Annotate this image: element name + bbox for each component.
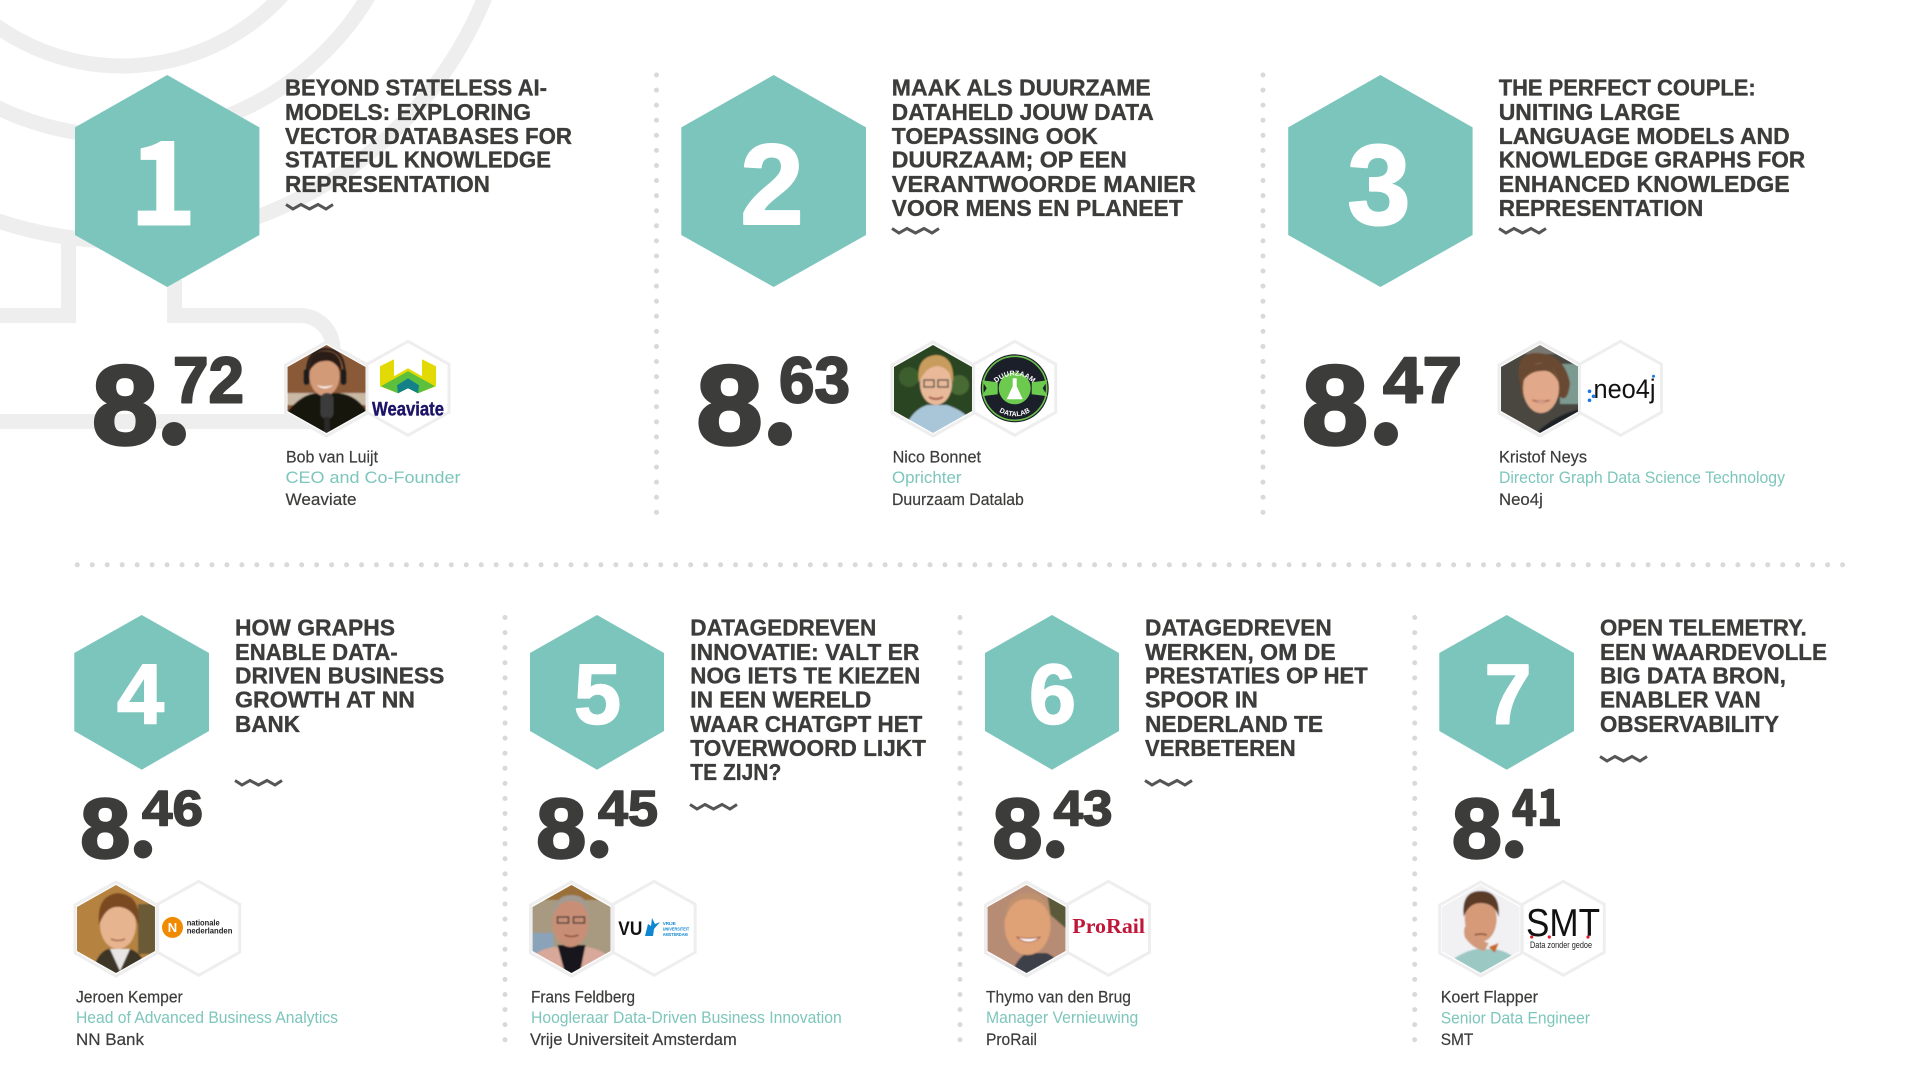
panel: talk 5 [530,615,926,1049]
speaker details: NN Bank [76,1030,144,1049]
panel: talk 1 [75,75,572,509]
title 6 [1145,615,1368,761]
title 3: ENHANCED KNOWLEDGE [1499,171,1790,197]
squiggle [892,228,939,233]
speaker details: Duurzaam Datalab [892,490,1024,509]
title 6: PRESTATIES OP HET [1145,663,1368,689]
logo: Duurzaam Datalab [972,340,1057,437]
speaker details [986,988,1138,1049]
logo: Nationale Nederlanden: nationale [187,918,220,928]
logo: Vrije Universiteit Amsterdam [613,881,695,975]
score 8.72: 8 [92,343,158,468]
title 6: VERBETEREN [1145,735,1296,761]
score 8.45: 8 [536,782,586,876]
title 4: BANK [235,711,300,737]
title 3: UNITING LARGE [1499,99,1680,125]
rank hexagon 5: 5 [574,648,621,742]
speaker details: Manager Vernieuwing [986,1008,1138,1027]
title 4: DRIVEN BUSINESS [235,663,444,689]
title 5: INNOVATIE: VALT ER [690,639,920,665]
title 5: WAAR CHATGPT HET [690,711,922,737]
portrait: Frans Feldberg [530,882,612,976]
speaker details: Koert Flapper [1441,988,1538,1006]
title 1: VECTOR DATABASES FOR [285,123,572,149]
logo: Vrije Universiteit Amsterdam: VRIJE [663,921,676,926]
logo: Nationale Nederlanden [158,881,240,975]
logo: SMT: Data zonder gedoe [1530,940,1592,951]
score 8.45: 45 [598,780,658,836]
title 3: THE PERFECT COUPLE: [1499,75,1756,101]
rank hexagon 2: 2 [740,122,804,249]
title 1: MODELS: EXPLORING [285,99,531,125]
title 4: ENABLE DATA- [235,639,398,665]
speaker details: Vrije Universiteit Amsterdam [530,1030,737,1049]
logo: Weaviate [367,341,449,435]
speaker details: Jeroen Kemper [76,988,183,1006]
portrait: Kristof Neys [1499,342,1581,436]
squiggle [690,804,737,809]
title 2: VOOR MENS EN PLANEET [892,195,1183,221]
speaker details: Weaviate [286,490,356,509]
title 7 [1600,615,1827,737]
logo: Nationale Nederlanden: nederlanden [187,926,232,936]
score 8.43: 8 [992,782,1042,876]
speaker details: Thymo van den Brug [986,988,1131,1006]
speaker details: Neo4j [1499,490,1543,509]
title 7: ENABLER VAN [1600,687,1761,713]
logo: Vrije Universiteit Amsterdam: VU [618,919,642,940]
rank hexagon 1 [75,75,259,287]
rank hexagon 4 [74,615,209,770]
title 1: BEYOND STATELESS AI- [285,75,547,101]
logo: Nationale Nederlanden: N [168,920,177,935]
squiggle [1600,756,1647,761]
score 8.43 [992,780,1112,876]
score 8.46: 8 [80,782,130,876]
rank hexagon 5 [530,615,664,770]
rank hexagon 2 [681,75,866,287]
logo: Vrije Universiteit Amsterdam: AMSTERDAM [663,932,688,937]
score 8.46: 46 [142,780,203,836]
speaker details: SMT [1441,1030,1473,1049]
title 7: EEN WAARDEVOLLE [1600,639,1827,665]
speaker details: Frans Feldberg [531,988,635,1006]
speaker details: Oprichter [892,468,962,487]
score 8.63 [696,343,850,468]
rank hexagon 1: 1 [129,91,197,259]
speaker details: Hoogleraar Data-Driven Business Innovation [531,1008,842,1027]
speaker details: ProRail [986,1030,1037,1049]
panel: talk 2 [681,75,1196,509]
panel: talk 6 [985,615,1368,1049]
speaker details [530,988,842,1049]
title 7: OBSERVABILITY [1600,711,1779,737]
rank hexagon 7 [1439,615,1574,770]
title 3: LANGUAGE MODELS AND [1499,123,1790,149]
panel: talk 3 [1288,75,1806,509]
score 8.63: 63 [779,344,850,416]
title 6: DATAGEDREVEN [1145,615,1332,641]
speaker details [286,448,461,509]
rank hexagon 3: 3 [1347,122,1411,249]
speaker details: Head of Advanced Business Analytics [76,1008,338,1027]
score 8.47: 8 [1302,343,1368,468]
score 8.47 [1302,343,1462,468]
title 5: NOG IETS TE KIEZEN [690,663,920,689]
portrait: Koert Flapper [1440,882,1522,976]
logo: SMT [1522,881,1604,975]
panel: talk 4 [74,615,444,1049]
title 1: REPRESENTATION [285,171,490,197]
title 4: GROWTH AT NN [235,687,415,713]
rank hexagon 4: 4 [117,648,164,742]
rank hexagon 3 [1288,75,1473,287]
squiggle [1145,780,1192,785]
title 5: TE ZIJN? [690,759,781,785]
squiggle [1499,228,1546,233]
speaker details [1441,988,1590,1049]
portrait: Nico Bonnet [892,342,974,436]
score 8.45 [536,780,658,876]
title 7: BIG DATA BRON, [1600,663,1786,689]
panel: talk 7 [1439,615,1827,1049]
squiggle [286,204,333,209]
title 4: HOW GRAPHS [235,615,395,641]
title 4 [235,615,444,737]
speaker details: Kristof Neys [1499,448,1587,466]
background circuit pattern [0,0,514,422]
logo: ProRail: ProRail [1072,914,1145,938]
speaker details [892,448,1024,509]
portrait: Jeroen Kemper [75,882,157,976]
rank hexagon 6 [985,615,1119,770]
score 8.41: 8 [1452,782,1502,876]
title 5: TOVERWOORD LIJKT [690,735,926,761]
title 2: MAAK ALS DUURZAME [892,75,1151,101]
logo: Weaviate: Weaviate [372,399,444,420]
portrait: Thymo van den Brug [986,882,1068,976]
speaker details: Bob van Luijt [286,448,378,466]
rank hexagon 6: 6 [1029,648,1076,742]
title 2 [892,75,1196,221]
score 8.72: 72 [173,344,244,416]
title 1 [285,75,572,197]
title 2: DATAHELD JOUW DATA [892,99,1154,125]
title 6: SPOOR IN [1145,687,1258,713]
score 8.72 [92,343,244,468]
portrait: Bob van Luijt [286,342,368,436]
logo: SMT: SMT [1526,902,1600,945]
speaker details [76,988,338,1049]
logo: Vrije Universiteit Amsterdam: UNIVERSITEIT [663,926,690,932]
speaker details: CEO and Co-Founder [286,468,461,487]
score 8.41 [1452,768,1562,876]
title 5 [690,615,926,785]
title 3 [1499,75,1806,221]
logo: Duurzaam Datalab: DUURZAAM [994,370,1036,383]
title 1: STATEFUL KNOWLEDGE [285,147,551,173]
score 8.41: 41 [1512,768,1562,840]
score 8.47: 47 [1383,344,1462,416]
logo: Duurzaam Datalab: DATALAB [999,408,1030,416]
logo: neo4j: neo4j [1594,374,1656,404]
score 8.46 [80,780,203,876]
speaker details [1499,448,1785,509]
title 6: NEDERLAND TE [1145,711,1323,737]
squiggle [235,780,282,785]
title 3: KNOWLEDGE GRAPHS FOR [1499,147,1806,173]
title 6: WERKEN, OM DE [1145,639,1336,665]
title 2: DUURZAAM; OP EEN [892,147,1127,173]
title 2: TOEPASSING OOK [892,123,1098,149]
rank hexagon 7: 7 [1484,648,1532,742]
title 7: OPEN TELEMETRY. [1600,615,1807,641]
logo: neo4j [1580,341,1662,435]
score 8.63: 8 [696,343,762,468]
title 2: VERANTWOORDE MANIER [892,171,1196,197]
title 3: REPRESENTATION [1499,195,1703,221]
speaker details: Senior Data Engineer [1441,1008,1590,1028]
speaker details: Director Graph Data Science Technology [1499,468,1785,487]
title 5: IN EEN WERELD [690,687,871,713]
title 5: DATAGEDREVEN [690,615,876,641]
score 8.43: 43 [1054,780,1112,836]
speaker details: Nico Bonnet [893,448,981,466]
logo: ProRail [1068,881,1150,975]
